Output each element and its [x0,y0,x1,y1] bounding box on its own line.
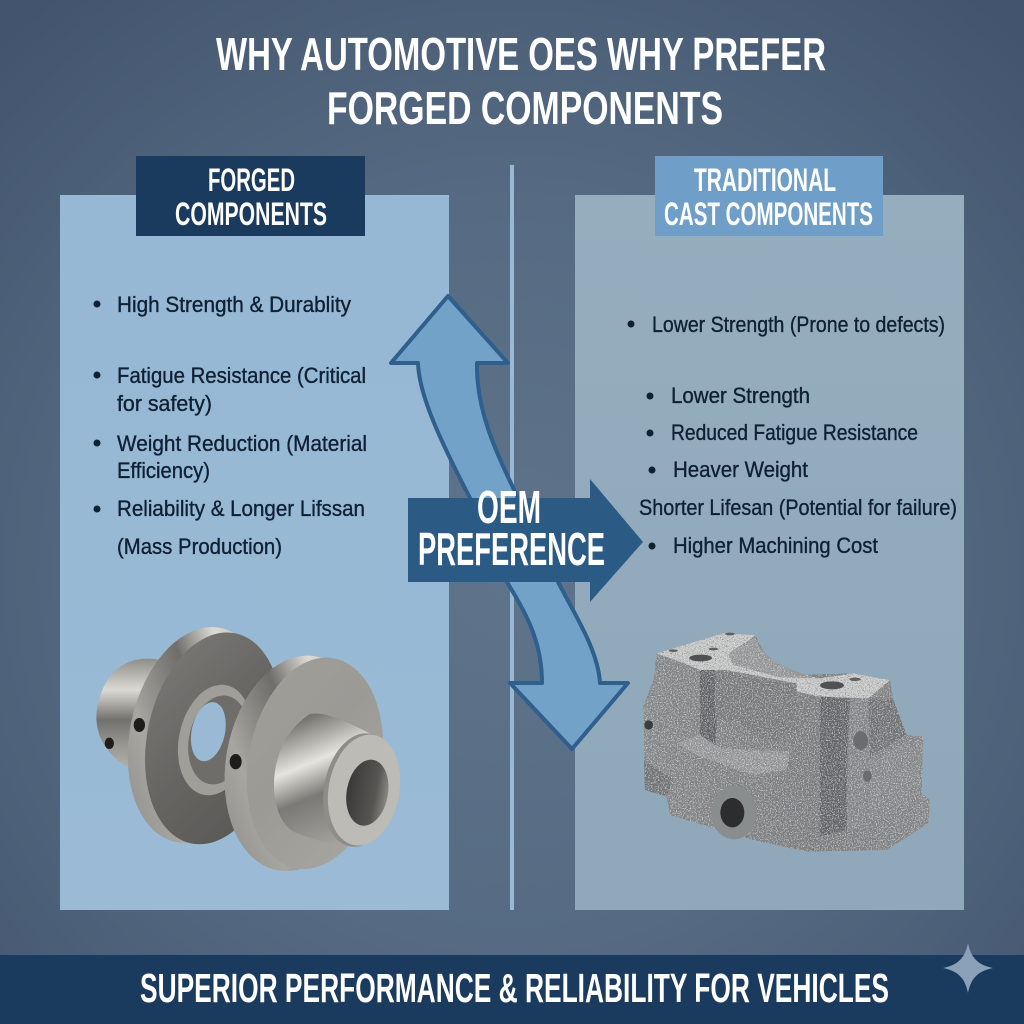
list: forged benefits: Weight Reduction (Material [117,431,367,456]
list: cast drawbacks: Higher Machining Cost [673,533,878,558]
heading: traditional cast components: TRADITIONAL [694,162,836,198]
arrow: OEM preference: PREFERENCE [418,523,605,575]
heading: traditional cast components [655,156,883,236]
heading: forged components: FORGED [208,162,295,198]
list: cast drawbacks: Heaver Weight [673,457,808,482]
list: cast drawbacks: Reduced Fatigue Resistance [671,420,918,445]
heading: traditional cast components: CAST COMPONENTS [664,196,873,232]
list: forged benefits: Reliability & Longer Lifssan [117,496,365,521]
list: forged benefits [94,292,367,559]
icon: sparkle star [943,943,993,993]
list: forged benefits: Fatigue Resistance (Critical [117,363,366,388]
arrow: curved double-headed [391,296,628,749]
center divider line [510,165,514,910]
list: forged benefits: for safety) [117,391,212,416]
title: FORGED COMPONENTS [327,82,723,134]
list: cast drawbacks: Lower Strength [671,383,810,408]
image: forged metal component [96,614,409,883]
list: forged benefits: (Mass Production) [117,534,282,559]
list: forged benefits: Efficiency) [117,458,210,483]
panel: traditional cast components background [575,195,964,910]
list: forged benefits: High Strength & Durablity [117,292,351,317]
list: cast drawbacks [628,312,957,558]
list: cast drawbacks: Lower Strength (Prone to defects) [652,312,945,337]
arrow: OEM preference [408,479,643,602]
list: cast drawbacks: Shorter Lifesan (Potential for failure) [639,495,957,520]
image: rough cast metal component [640,630,933,853]
arrow: OEM preference: OEM [477,481,541,533]
heading: forged components: COMPONENTS [175,196,327,232]
footer banner [0,955,1024,1024]
panel: forged components background [60,195,449,910]
heading: forged components [136,156,365,236]
title [216,28,826,134]
